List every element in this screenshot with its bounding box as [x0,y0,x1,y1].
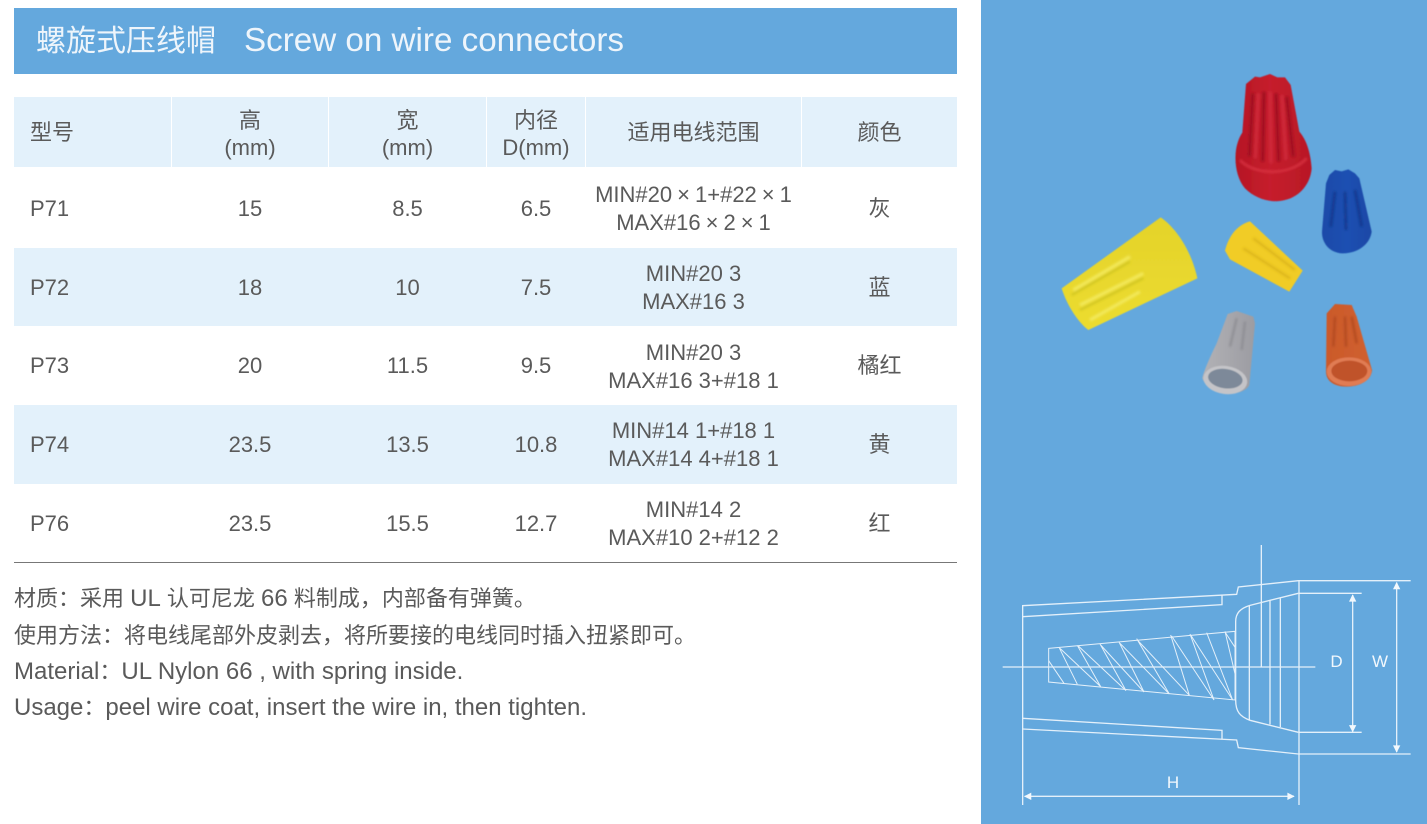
row P72: MAX#16 3 [642,289,745,314]
label H: H [1167,773,1179,792]
row P76: 12.7 [515,511,557,536]
row P73: 11.5 [387,353,428,378]
label W: W [1372,652,1388,671]
table header row: (mm) [382,135,433,160]
row P76: 15.5 [386,511,429,536]
table header row [14,97,957,167]
row P74: 黄 [868,432,890,457]
row P76: MIN#14 2 [646,497,741,522]
title bar [14,8,957,74]
row P73 [30,340,902,393]
row P76: 23.5 [229,511,271,536]
row P74: P74 [30,432,69,457]
row P72: 7.5 [521,275,551,300]
row P71: 6.5 [521,196,551,221]
row P72: 蓝 [868,275,890,300]
connector: red [1235,74,1312,201]
table header row: (mm) [224,135,276,160]
title text: 螺旋式压线帽 Screw on wire connectors [36,22,624,59]
row P74: 10.8 [515,432,557,457]
row P73: 橘红 [857,353,902,378]
dimension arrow: H [1025,794,1294,798]
dimension arrow: D [1351,595,1355,732]
outline of connector [1003,545,1411,805]
row P74 [14,405,957,484]
row P73: 20 [238,353,262,378]
notes text block: Material：UL Nylon 66 , with spring inside. [14,658,463,685]
row P71: 灰 [868,196,890,221]
product photo: connectors [1062,74,1372,397]
notes text block: Usage：peel wire coat, insert the wire in, then tighten. [14,694,587,721]
row P71: MIN#20×1+#22×1 [595,182,792,207]
connector: grey [1202,311,1255,397]
table header row: D(mm) [502,135,570,160]
connector: blue [1322,169,1372,253]
row P76 [14,484,957,563]
row P73: MIN#20 3 [646,340,741,365]
row P74: 13.5 [386,432,429,457]
row P72: 18 [238,275,262,300]
notes text block [14,585,696,721]
row P73: 9.5 [521,353,551,378]
row P73: MAX#16 3+#18 1 [608,368,779,393]
row P72: MIN#20 3 [646,261,741,286]
connector: orange [1326,304,1372,387]
row P76: 红 [868,511,890,536]
table header row: 颜色 [857,120,902,145]
connector: large yellow [1062,217,1197,330]
dimension arrow: W [1395,583,1399,752]
connector: small yellow [1225,221,1303,292]
row P73: P73 [30,353,69,378]
table header row: 内径 [514,108,558,133]
dimension drawing [1003,545,1411,805]
row P76: MAX#10 2+#12 2 [608,525,779,550]
row P71: P71 [30,196,69,221]
row P71: 15 [238,196,262,221]
table header row: 型号 [30,120,74,145]
row P72: P72 [30,275,69,300]
row P74: MAX#14 4+#18 1 [608,446,779,471]
row P72 [14,248,957,326]
row P71: 8.5 [392,196,423,221]
row P74: 23.5 [229,432,271,457]
table header row: 宽 [396,108,418,133]
row P71 [30,182,890,235]
table header row: 高 [239,108,261,133]
label D: D [1330,652,1343,671]
notes text block: 材质：采用 UL 认可尼龙 66 料制成，内部备有弹簧。 [14,585,536,612]
row P72: 10 [395,275,420,300]
table header row: 适用电线范围 [627,120,760,145]
row P76: P76 [30,511,69,536]
right side panel [981,0,1427,824]
row P71: MAX#16×2×1 [616,210,771,235]
spring thread [1049,631,1236,700]
row P74: MIN#14 1+#18 1 [612,418,775,443]
table [14,97,957,563]
notes text block: 使用方法：将电线尾部外皮剥去，将所要接的电线同时插入扭紧即可。 [14,623,696,648]
